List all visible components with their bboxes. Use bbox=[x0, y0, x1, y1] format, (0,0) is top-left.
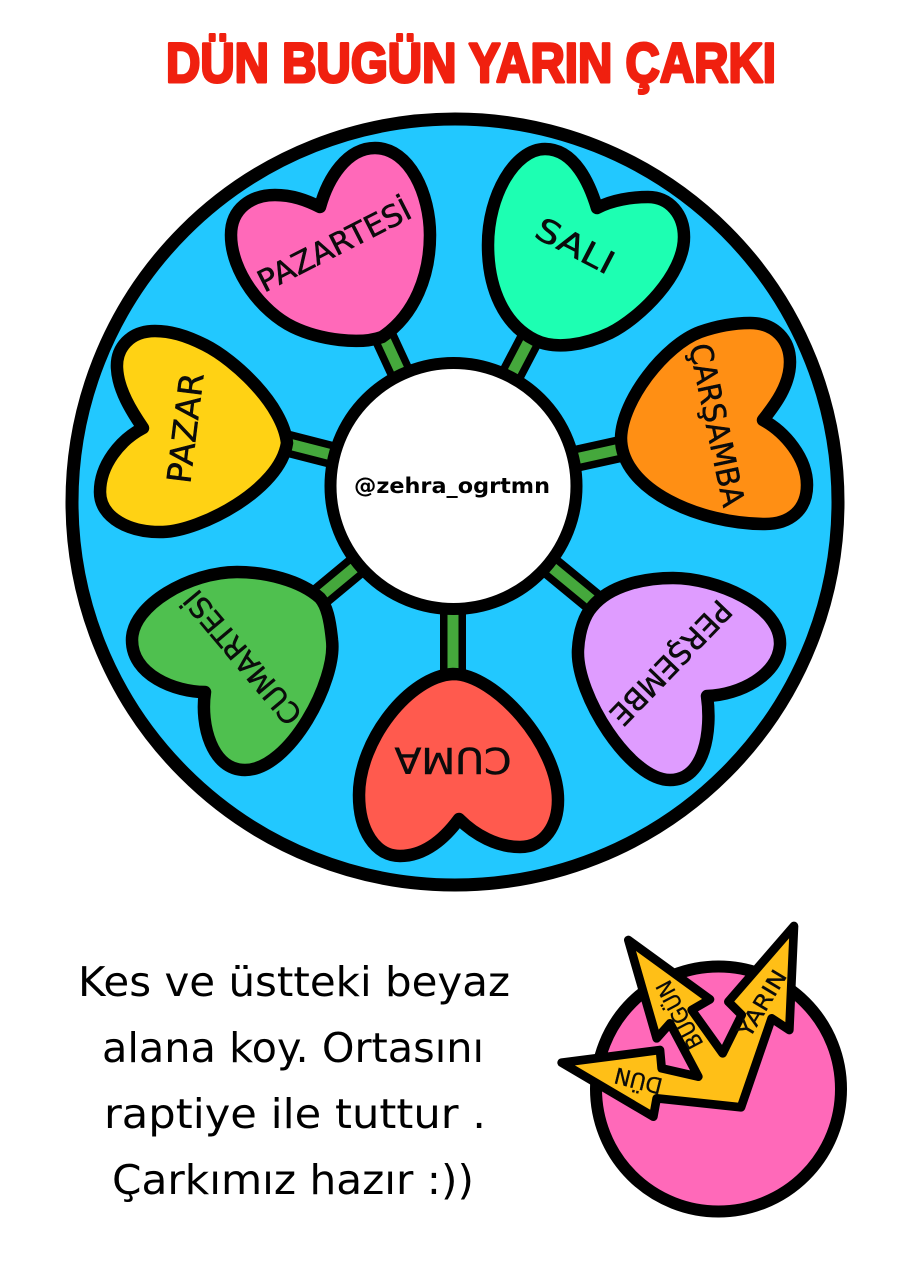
heart: Pazar: PAZAR bbox=[159, 371, 212, 486]
arrows: dün, bugün, yarın: BUGÜN bbox=[651, 976, 709, 1053]
arrows: dün, bugün, yarın: YARIN bbox=[733, 966, 793, 1043]
heart: Salı: SALI bbox=[529, 210, 621, 282]
instructions text: raptiye ile tuttur . bbox=[104, 1090, 486, 1138]
instructions text bbox=[78, 958, 510, 1204]
heart: Salı bbox=[488, 149, 684, 345]
arrows: dün, bugün, yarın: DÜN bbox=[612, 1062, 665, 1098]
stems bbox=[285, 335, 625, 678]
instructions text: Kes ve üstteki beyaz bbox=[78, 958, 510, 1006]
heart: Çarşamba bbox=[621, 323, 807, 524]
instructions text: Çarkımız hazır :)) bbox=[112, 1156, 474, 1204]
wheel background disc bbox=[72, 119, 838, 885]
heart: Cumartesi: CUMARTESİ bbox=[177, 583, 309, 731]
heart: Pazar bbox=[100, 331, 287, 532]
heart: Pazartesi bbox=[231, 148, 430, 341]
heart: Perşembe: PERŞEMBE bbox=[602, 592, 738, 732]
example wheel with arrows bbox=[562, 926, 841, 1212]
heart: Cuma: CUMA bbox=[394, 739, 512, 780]
instructions text: alana koy. Ortasını bbox=[102, 1024, 484, 1072]
wheel bbox=[72, 119, 838, 885]
pink circle bbox=[596, 966, 841, 1212]
title: DÜN BUGÜN YARIN ÇARKI bbox=[166, 31, 776, 94]
heart: Pazartesi: PAZARTESİ bbox=[251, 192, 417, 300]
center hub: @zehra_ogrtmn bbox=[354, 474, 550, 498]
center hub bbox=[330, 363, 576, 609]
heart: Cuma bbox=[359, 674, 558, 856]
arrows: dün, bugün, yarın bbox=[562, 926, 794, 1117]
heart: Perşembe bbox=[578, 578, 780, 780]
heart: Cumartesi bbox=[132, 572, 332, 770]
heart: Çarşamba: ÇARŞAMBA bbox=[681, 340, 751, 510]
